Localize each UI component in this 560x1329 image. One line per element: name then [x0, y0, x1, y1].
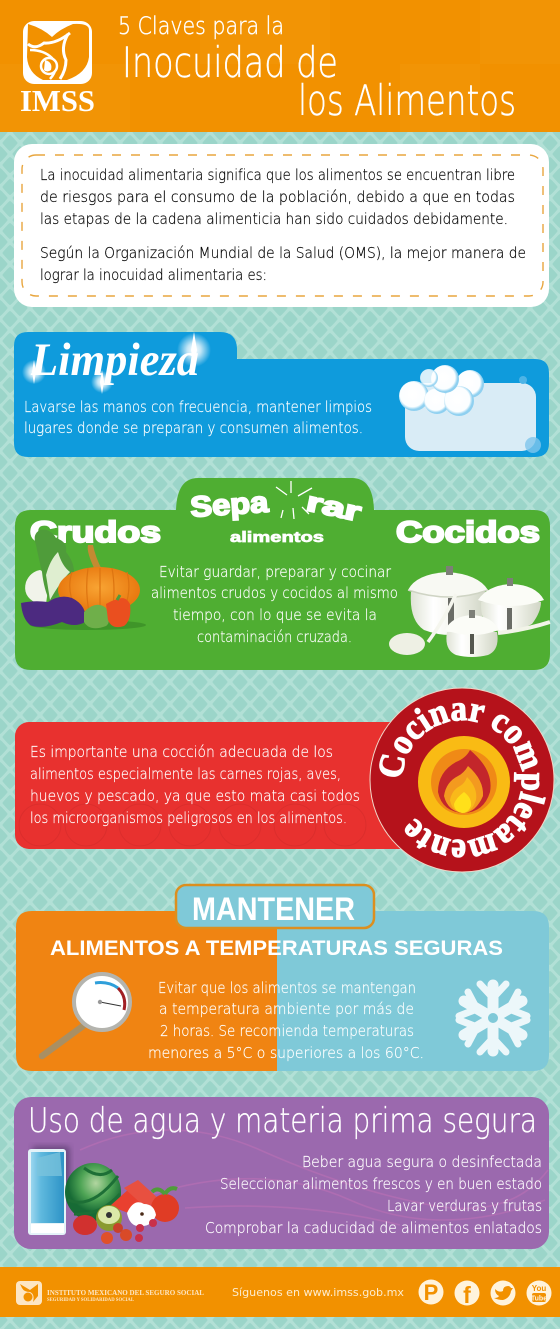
label: alimentos: alimentos [230, 530, 324, 546]
badge: cocinar completamente: Cocinar completamente [379, 702, 546, 858]
footer logo [16, 1281, 42, 1305]
panel: limpieza [14, 332, 549, 457]
icon: thermometer in magnifier [42, 974, 130, 1056]
intro text: lograr la inocuidad alimentaria es: [40, 266, 267, 284]
cocinar text [30, 743, 360, 827]
mantener text: 2 horas. Se recomienda temperaturas [160, 1022, 414, 1040]
footer institution name: SEGURIDAD Y SOLIDARIDAD SOCIAL [47, 1298, 135, 1303]
heading: Separar: Sepa [189, 487, 270, 524]
intro text: las etapas de la cadena alimenticia han sido cuidados debidamente. [40, 210, 508, 228]
intro text: de riesgos para el consumo de la población, debido a que en todas [40, 188, 515, 206]
footer [0, 1267, 560, 1317]
icon: cooking pots [389, 566, 550, 657]
header band [0, 0, 560, 132]
icon: facebook [454, 1280, 480, 1308]
footer institution name: INSTITUTO MEXICANO DEL SEGURO SOCIAL [47, 1288, 204, 1297]
separar text: Evitar guardar, preparar y cocinar [159, 563, 392, 581]
separar text [151, 563, 398, 646]
label: Crudos: Crudos [30, 516, 161, 549]
logo: IMSS [20, 21, 95, 118]
heading: Limpieza: Limpieza [30, 334, 199, 386]
icon: youtube [526, 1280, 552, 1306]
decorative wave lines [80, 1130, 548, 1225]
subheading: ALIMENTOS A TEMPERATURAS SEGURAS [50, 937, 503, 960]
heading tab: Mantener: MANTENER [192, 891, 355, 927]
panel: introduction [14, 144, 549, 307]
separar text: alimentos crudos y cocidos al mismo [151, 584, 398, 602]
icon: snowflake [459, 984, 527, 1052]
icon: raw vegetables [21, 530, 146, 630]
panel: mantener [16, 885, 549, 1071]
limpieza text [24, 398, 372, 437]
watermark circles [19, 804, 366, 846]
separar text: tiempo, con lo que se evita la [173, 606, 377, 624]
panel: agua y materia prima [14, 1097, 549, 1249]
mantener text [148, 979, 424, 1062]
icon: facebook: f [463, 1282, 471, 1308]
panel: separar [15, 478, 550, 670]
icon: flame [438, 750, 491, 813]
cocinar text: alimentos especialmente las carnes rojas, aves, [30, 765, 341, 783]
logo: IMSS: IMSS [20, 83, 95, 118]
mantener text: a temperatura ambiente por más de [159, 1000, 414, 1018]
footer institution name [47, 1288, 204, 1303]
title: 5 Claves para la [118, 12, 284, 40]
list: Beber agua segura o desinfectada [302, 1153, 542, 1171]
icon: soap bar with bubbles [399, 365, 541, 453]
intro text [40, 166, 526, 284]
panel: cocinar [15, 688, 554, 872]
cocinar text: los microorganismos peligrosos en los alimentos. [30, 809, 347, 827]
icon: pinterest: P [424, 1280, 438, 1305]
label: Cocidos: Cocidos [396, 516, 540, 549]
icon: glass of water [28, 1146, 70, 1235]
icon: pinterest [418, 1280, 444, 1305]
icon: youtube: Tube [531, 1296, 547, 1302]
icon: youtube: You [532, 1284, 546, 1293]
separar text: contaminación cruzada. [197, 628, 352, 646]
footer website: Síguenos en www.imss.gob.mx [232, 1286, 404, 1299]
limpieza text: lugares donde se preparan y consumen alimentos. [24, 419, 363, 437]
cocinar text: huevos y pescado, ya que esto mata casi todos [30, 787, 360, 805]
mantener text: Evitar que los alimentos se mantengan [158, 979, 416, 997]
icon: twitter [490, 1280, 516, 1306]
title [118, 12, 516, 125]
list [205, 1153, 542, 1237]
intro text: Según la Organización Mundial de la Salud (OMS), la mejor manera de [40, 244, 526, 262]
limpieza text: Lavarse las manos con frecuencia, mantener limpios [24, 398, 372, 416]
heading: Separar [189, 481, 365, 527]
title: Inocuidad de [122, 38, 338, 87]
mantener text: menores a 5°C o superiores a los 60°C. [148, 1044, 424, 1062]
cocinar text: Es importante una cocción adecuada de los [30, 743, 333, 761]
heading: Separar: rar [304, 487, 365, 527]
icon: fruit [65, 1163, 179, 1244]
